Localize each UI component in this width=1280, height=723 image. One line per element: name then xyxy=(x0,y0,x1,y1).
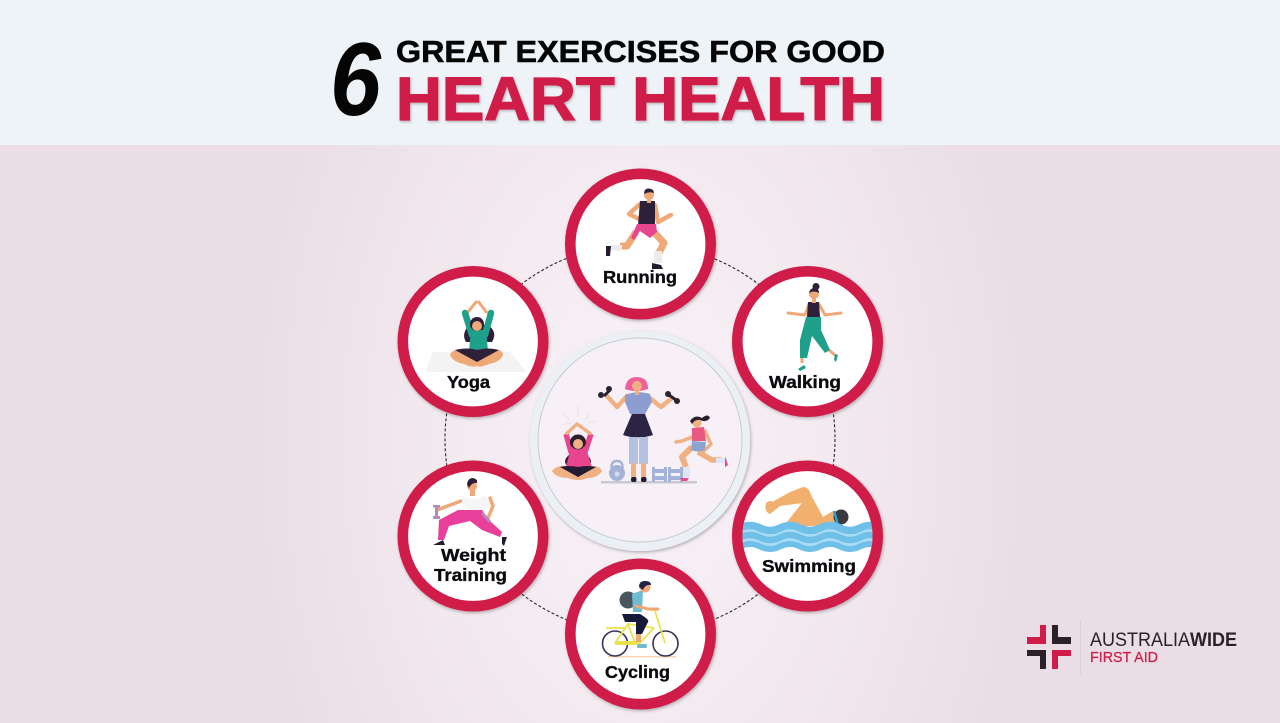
center panel: exercising group xyxy=(530,331,750,551)
panel: weight training xyxy=(403,466,543,606)
ground line xyxy=(601,481,697,484)
label: weight training xyxy=(434,545,507,585)
label: weight training: Weight xyxy=(441,545,506,565)
title: numeral 6: 6 xyxy=(330,22,382,138)
kettlebell xyxy=(609,461,625,481)
icon: cyclist xyxy=(602,581,678,658)
panel: yoga xyxy=(403,271,543,412)
icon: seated yoga figure xyxy=(425,301,527,372)
page background xyxy=(0,145,1280,723)
seated yoga woman xyxy=(552,406,602,480)
label: yoga: Yoga xyxy=(447,372,490,392)
label: cycling: Cycling xyxy=(605,662,670,682)
wordmark: AUSTRALIAWIDE xyxy=(1090,630,1237,651)
icon: medical cross mark xyxy=(1027,625,1071,669)
label: weight training: Training xyxy=(434,565,507,585)
icon: runner xyxy=(606,188,671,269)
icon: walker xyxy=(788,283,841,371)
icon: lunging man with dumbbells xyxy=(433,478,507,546)
label: walking: Walking xyxy=(769,372,841,392)
panel: cycling xyxy=(570,564,711,704)
panel: swimming xyxy=(737,466,880,606)
running woman xyxy=(676,416,728,481)
label: swimming: Swimming xyxy=(762,556,856,576)
panel: running xyxy=(570,174,711,314)
title: second line: HEART HEALTH xyxy=(396,65,885,133)
label: running: Running xyxy=(603,267,677,287)
dashed connector ring xyxy=(445,244,835,634)
header band xyxy=(0,0,1280,145)
woman with dumbbells xyxy=(598,377,680,482)
logo: Australia Wide First Aid xyxy=(1027,620,1237,675)
tagline: FIRST AID xyxy=(1090,649,1158,666)
icon: swimmer xyxy=(740,487,880,549)
waves xyxy=(740,526,880,549)
title: first line: GREAT EXERCISES FOR GOOD xyxy=(396,34,885,69)
panel: walking xyxy=(737,271,878,412)
dumbbell stack xyxy=(652,467,683,482)
